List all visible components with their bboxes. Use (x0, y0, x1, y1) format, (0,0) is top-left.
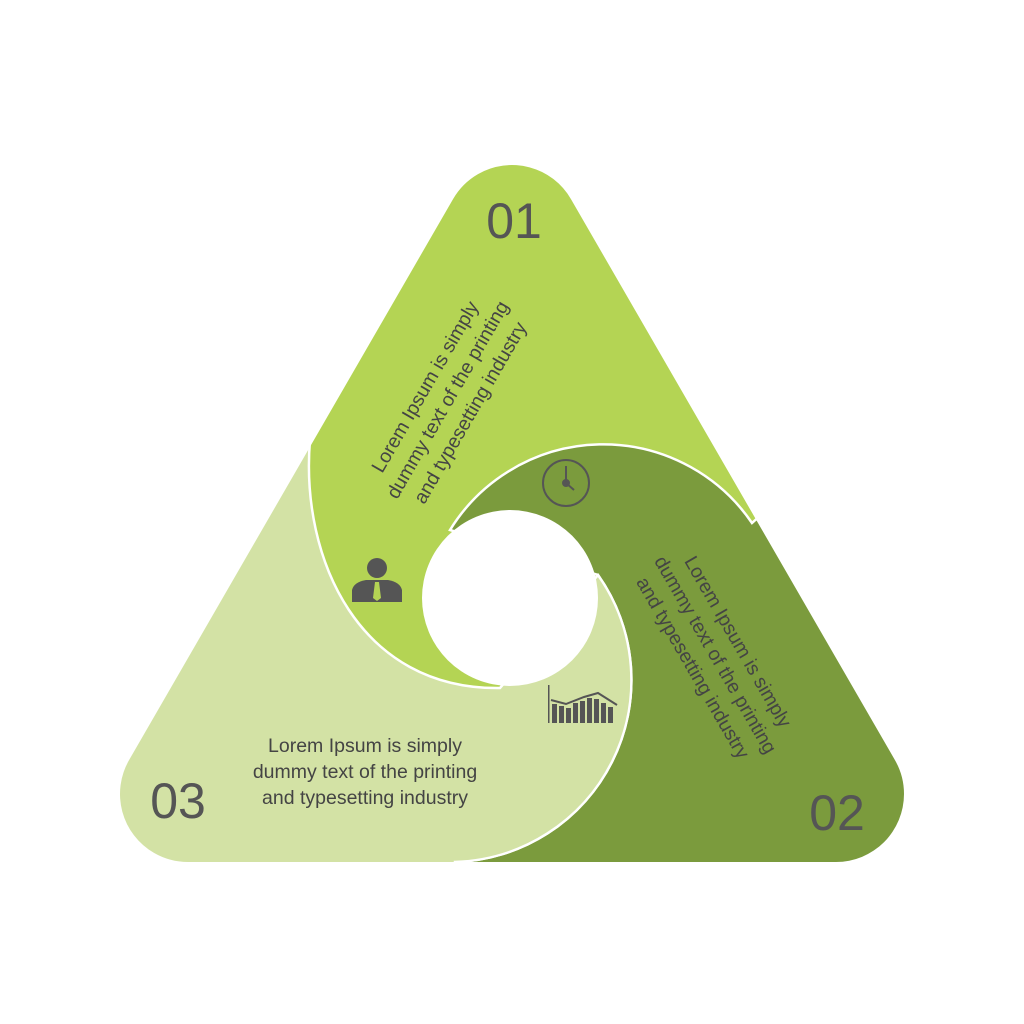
text 01: Lorem Ipsum is simply (367, 297, 484, 476)
text 01: dummy text of the printing (382, 297, 514, 503)
text 02 (627, 539, 803, 771)
text 02: dummy text of the printing (649, 552, 781, 758)
icon: person (352, 558, 402, 602)
icon: bar chart (548, 685, 617, 723)
number 02: 02 (809, 785, 865, 841)
number 01: 01 (486, 193, 542, 249)
text 01 (360, 284, 536, 516)
text 03: Lorem Ipsum is simply (268, 735, 462, 757)
icon: clock (543, 460, 589, 506)
triangle infographic (120, 165, 904, 862)
text 01: and typesetting industry (409, 318, 532, 508)
segment 03 (120, 445, 633, 862)
number 03: 03 (150, 773, 206, 829)
text 02: Lorem Ipsum is simply (679, 553, 796, 732)
text 02: and typesetting industry (631, 573, 754, 763)
text 03: dummy text of the printing (253, 761, 477, 783)
segment 01 (310, 165, 756, 687)
text 03 (253, 735, 477, 809)
segment 02 (448, 443, 904, 862)
text 03: and typesetting industry (262, 787, 468, 809)
center hole (422, 510, 598, 686)
